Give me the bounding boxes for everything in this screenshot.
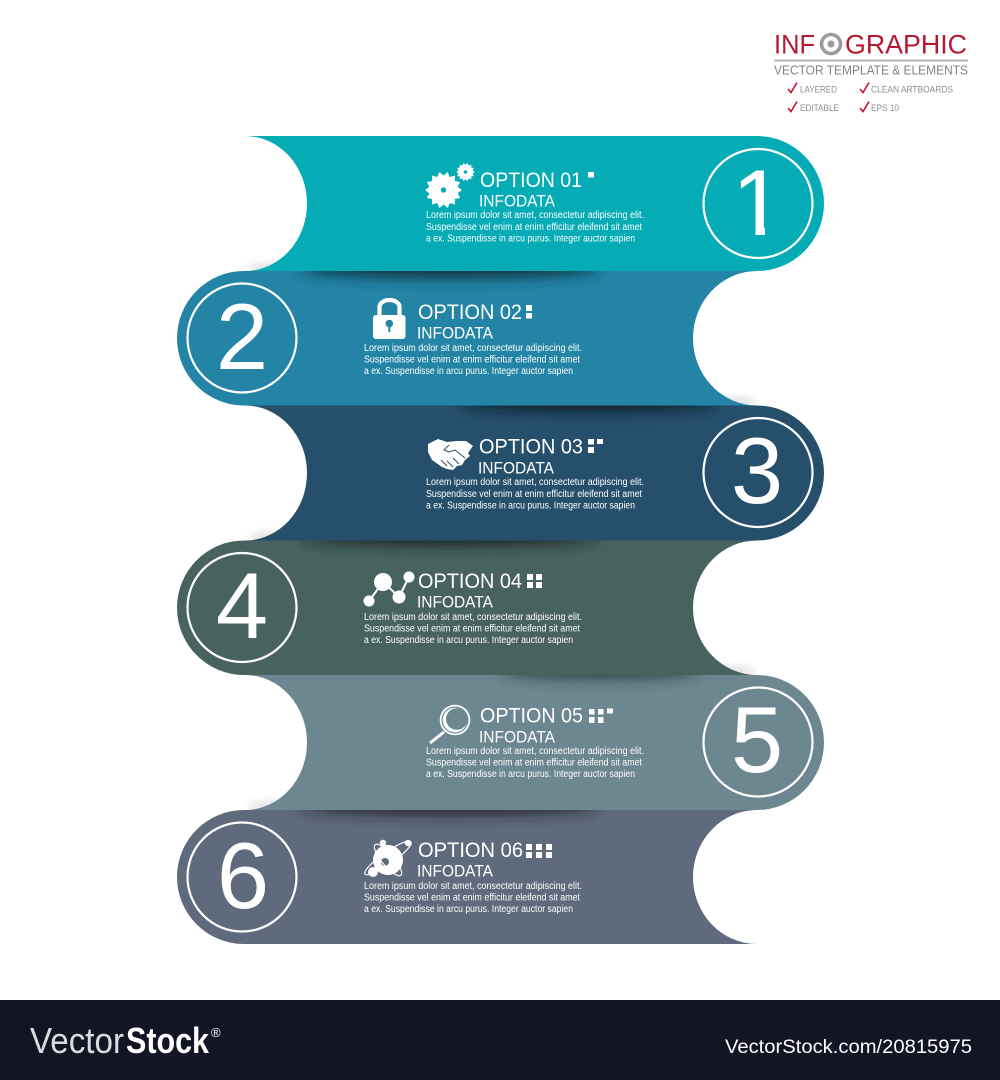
- body text: a ex. Suspendisse in arcu purus. Integer auctor sapien: [426, 234, 635, 244]
- number badge 1: 1: [732, 150, 784, 255]
- icon: connected nodes: [364, 572, 414, 606]
- body text: Suspendisse vel enim at enim efficitur eleifend sit amet: [426, 758, 642, 768]
- step dots: [526, 844, 552, 858]
- body text: [426, 210, 644, 244]
- number badge 1: [704, 149, 812, 258]
- feature checklist: [788, 82, 953, 114]
- number badge 6: [188, 822, 296, 932]
- heading: OPTION 04: [418, 570, 522, 593]
- feature checklist: CLEAN ARTBOARDS: [871, 84, 953, 96]
- logo wordmark: GRAPHIC: [845, 30, 967, 60]
- subheading: INFODATA: [417, 862, 493, 880]
- feature checklist: EPS 10: [871, 103, 899, 114]
- body text: Lorem ipsum dolor sit amet, consectetur adipiscing elit.: [364, 612, 582, 623]
- body text: [426, 477, 644, 512]
- footer brand logo: Stock: [126, 1020, 210, 1061]
- band 3: option 03: [245, 394, 824, 540]
- body text: a ex. Suspendisse in arcu purus. Integer auctor sapien: [364, 635, 573, 646]
- soft shadows in the white cut-outs: [248, 264, 756, 810]
- body text: Lorem ipsum dolor sit amet, consectetur adipiscing elit.: [426, 210, 644, 221]
- icon: atom: [362, 837, 414, 879]
- body text: Suspendisse vel enim at enim efficitur eleifend sit amet: [364, 892, 580, 904]
- body text: a ex. Suspendisse in arcu purus. Integer auctor sapien: [364, 366, 573, 377]
- subheading: INFODATA: [478, 460, 554, 478]
- heading: OPTION 06: [418, 839, 523, 862]
- icon: magnifying glass: [430, 705, 470, 743]
- band 5: option 05: [245, 665, 824, 810]
- body text: [364, 343, 582, 377]
- number badge 2: [188, 284, 296, 392]
- subheading: INFODATA: [417, 594, 493, 612]
- icon: gears: [425, 163, 475, 208]
- subheading: INFODATA: [417, 324, 493, 342]
- band 6: option 06: [177, 798, 757, 944]
- heading: OPTION 03: [479, 436, 583, 458]
- logo wordmark: [774, 30, 967, 60]
- number badge 5: [704, 687, 812, 796]
- number badge 3: [704, 418, 812, 527]
- number badge 3: 3: [731, 418, 783, 523]
- footer brand logo: [30, 1020, 221, 1061]
- logo subtitle: VECTOR TEMPLATE & ELEMENTS: [774, 62, 968, 78]
- body text: a ex. Suspendisse in arcu purus. Integer auctor sapien: [426, 500, 635, 512]
- body text: [364, 612, 582, 646]
- footer image id: VectorStock.com/20815975: [725, 1036, 972, 1058]
- feature checklist: EDITABLE: [800, 103, 839, 114]
- number badge 5: 5: [731, 687, 783, 792]
- subheading: INFODATA: [479, 728, 555, 746]
- number badge 6: 6: [217, 823, 269, 928]
- body text: a ex. Suspendisse in arcu purus. Integer auctor sapien: [364, 904, 573, 915]
- body text: Suspendisse vel enim at enim efficitur eleifend sit amet: [364, 624, 580, 634]
- step dots: [526, 305, 532, 318]
- step dots: [589, 708, 613, 723]
- number badge 4: [188, 553, 296, 662]
- heading: OPTION 05: [480, 704, 583, 728]
- heading: OPTION 01: [480, 169, 582, 192]
- band 2: option 02: [177, 259, 757, 406]
- body text: Lorem ipsum dolor sit amet, consectetur adipiscing elit.: [364, 881, 582, 892]
- icon: handshake: [428, 439, 473, 470]
- body text: Suspendisse vel enim at enim efficitur eleifend sit amet: [426, 489, 642, 500]
- footer brand logo: ®: [211, 1025, 221, 1040]
- body text: [426, 746, 644, 780]
- subheading: INFODATA: [479, 192, 555, 210]
- body text: a ex. Suspendisse in arcu purus. Integer auctor sapien: [426, 769, 635, 780]
- footer bar: [0, 1000, 1000, 1080]
- body text: Lorem ipsum dolor sit amet, consectetur adipiscing elit.: [426, 477, 644, 488]
- step dots: [527, 574, 542, 588]
- number badge 2: 2: [216, 284, 268, 389]
- body text: Suspendisse vel enim at enim efficitur eleifend sit amet: [364, 354, 580, 366]
- footer brand logo: Vector: [30, 1020, 124, 1061]
- number badge 4: 4: [216, 553, 268, 658]
- band 1: option 01: [245, 136, 824, 271]
- heading: OPTION 02: [418, 301, 522, 324]
- step dots: [588, 439, 603, 453]
- body text: Lorem ipsum dolor sit amet, consectetur adipiscing elit.: [364, 343, 582, 354]
- band 4: option 04: [177, 529, 757, 675]
- body text: Suspendisse vel enim at enim efficitur eleifend sit amet: [426, 222, 642, 233]
- body text: [364, 881, 582, 915]
- icon: padlock: [373, 300, 406, 339]
- logo wordmark: INF: [774, 30, 815, 60]
- body text: Lorem ipsum dolor sit amet, consectetur adipiscing elit.: [426, 746, 644, 757]
- header: infographic logo block: [774, 30, 968, 114]
- step dots: [588, 172, 594, 178]
- feature checklist: LAYERED: [800, 84, 837, 96]
